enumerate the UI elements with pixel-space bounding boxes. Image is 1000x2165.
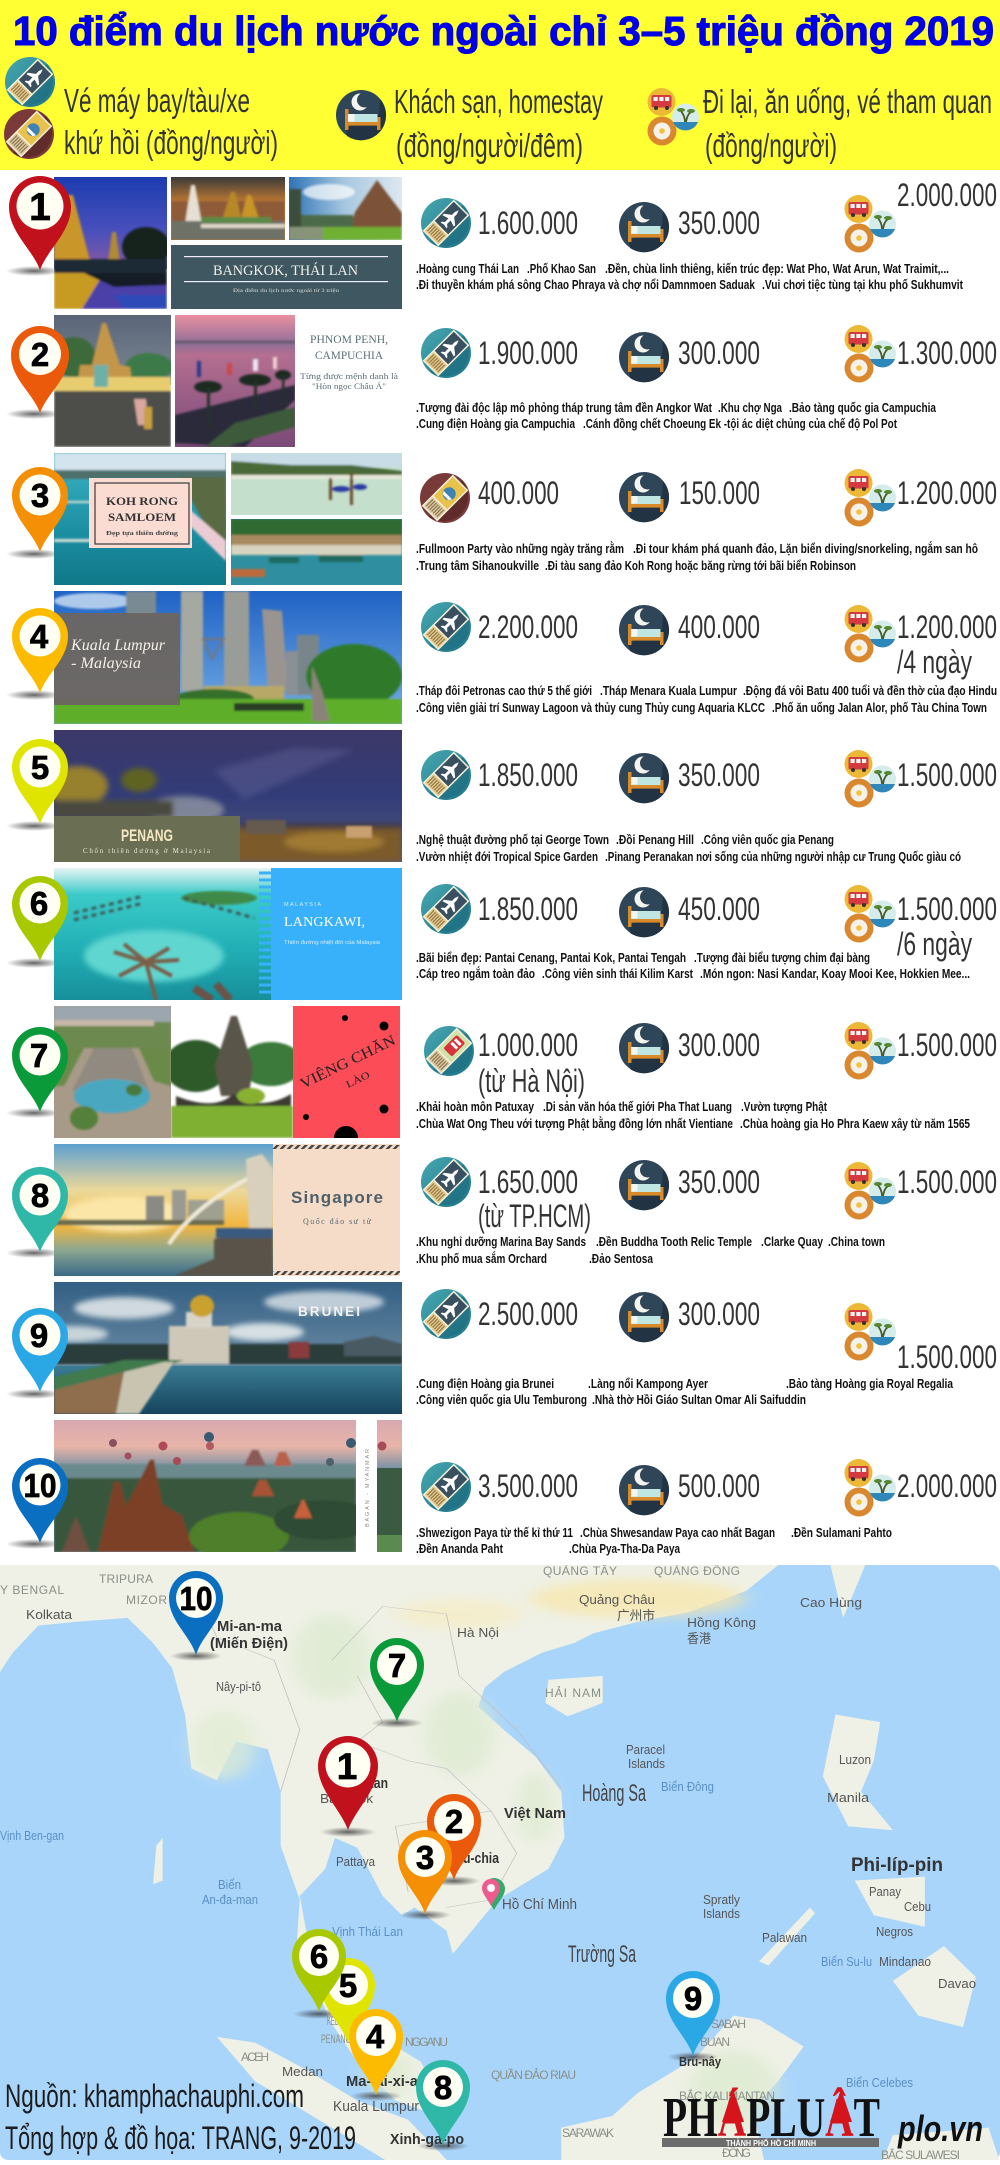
place labels: Vịnh Thái Lan: [332, 1924, 403, 1939]
highlights text: [416, 683, 997, 715]
pin 4: 4: [30, 618, 49, 655]
place labels: NGGANU: [405, 2035, 448, 2049]
icon: bed: [619, 332, 669, 382]
highlights text: .Đền Sulamani Pahto: [791, 1525, 892, 1540]
place labels: ĐÔNG: [722, 2145, 751, 2160]
place labels: Islands: [628, 1756, 665, 1771]
icon: boat ticket legend: [4, 109, 54, 159]
photo: Merlion: [54, 1144, 273, 1276]
place labels: ACEH: [241, 2050, 269, 2064]
map pin 4: [349, 2009, 403, 2095]
icon: plane ticket: [421, 328, 471, 378]
price: room: 450.000: [678, 891, 760, 927]
title card: Koh Rong: SAMLOEM: [108, 510, 176, 524]
photo: Independence monument: [54, 315, 171, 447]
pin 2: 2: [31, 336, 49, 373]
highlights text: .Khu nghỉ dưỡng Marina Bay Sands: [416, 1234, 586, 1249]
highlights text: .Clarke Quay: [761, 1234, 824, 1249]
icon: travel food sightseeing legend: [648, 88, 699, 146]
title card: Kuala Lumpur: Kuala Lumpur: [70, 637, 166, 654]
price: room: 350.000: [678, 1164, 760, 1200]
map pin 8: 8: [434, 2069, 452, 2106]
highlights text: .Shwezigon Paya từ thế kỉ thứ 11: [416, 1525, 573, 1540]
icon: expenses: [844, 195, 896, 252]
title card: Langkawi: MALAYSIA: [284, 902, 321, 908]
highlights text: .Đền Ananda Paht: [416, 1541, 504, 1556]
place labels: 香港: [687, 1631, 711, 1646]
place labels: Thái Lan: [338, 1775, 388, 1792]
highlights text: [416, 261, 964, 292]
photo: starry beach: [54, 730, 402, 862]
price: expenses: /4 ngày: [897, 644, 972, 680]
title card: Bangkok: [171, 245, 402, 309]
title card: Penang: Chốn thiên đường ở Malaysia: [83, 847, 211, 855]
legend text: expenses: [703, 83, 992, 164]
pin 6: 6: [30, 885, 48, 922]
photo: Wat Arun: [54, 177, 167, 309]
title: 10 điểm du lịch nước ngoài chỉ 3–5 triệu đồng 2019: [13, 8, 994, 54]
place labels: Quảng Châu: [579, 1592, 655, 1607]
highlights text: .Phố Khao San: [527, 261, 596, 276]
place labels: Hoàng Sa: [582, 1780, 646, 1807]
icon: bus ticket: [424, 1026, 474, 1076]
place labels: Cam-pu-chia: [425, 1850, 500, 1867]
icon: expenses: [844, 469, 896, 526]
icon: bed legend: [336, 90, 386, 140]
land masses: [0, 1560, 1000, 2165]
icon: plane ticket: [421, 1289, 471, 1339]
price: room: 350.000: [678, 205, 760, 241]
highlights text: .Fullmoon Party vào những ngày trăng rằm: [416, 541, 624, 556]
map pin 6: [292, 1929, 346, 2012]
place labels: 广州市: [617, 1608, 655, 1623]
source credit: [5, 2078, 356, 2156]
panel: row 3 Koh Rong Samloem: [6, 453, 997, 585]
highlights text: .Đi tàu sang đảo Koh Rong hoặc băng rừng tới bãi biển Robinson: [545, 558, 856, 573]
highlights text: .Khu phố mua sắm Orchard: [416, 1251, 547, 1266]
source credit: Tổng hợp & đồ họa: TRANG, 9-2019: [5, 2120, 356, 2156]
place labels: Islands: [703, 1906, 740, 1921]
icon: expenses: [844, 1459, 896, 1516]
place labels: Vịnh Ben-gan: [0, 1828, 64, 1843]
title card: Phnom Penh: PHNOM PENH,: [310, 332, 388, 346]
icon: bed: [619, 1292, 669, 1342]
place labels: Trường Sa: [568, 1941, 636, 1968]
highlights text: [416, 400, 937, 431]
price: room: 500.000: [678, 1468, 760, 1504]
map pin 4: 4: [366, 2018, 385, 2055]
icon: bed: [619, 605, 669, 655]
title card: Penang: [83, 826, 211, 855]
legend text: accommodation: (đồng/người/đêm): [396, 127, 583, 164]
place labels: Biển Đông: [661, 1779, 714, 1794]
place labels: BẮC SULAWESI: [881, 2147, 960, 2162]
price: tickets: 1.850.000: [478, 891, 578, 927]
title card: Vieng Chan: LÀO: [344, 1069, 372, 1091]
place labels: Bru-nây: [679, 2054, 722, 2069]
icon: expenses: [844, 605, 896, 662]
title card: Koh Rong: [89, 478, 192, 548]
highlights text: .Đền Buddha Tooth Relic Temple: [596, 1234, 752, 1249]
place labels: KEDAH: [327, 2014, 347, 2028]
highlights text: .Nhà thờ Hồi Giáo Sultan Omar Ali Saifuddin: [592, 1392, 806, 1407]
price: tickets: 1.900.000: [478, 335, 578, 371]
panel: row 9 Brunei: [6, 1282, 997, 1414]
place labels: QUẢNG TÂY: [543, 1563, 617, 1578]
legend text: expenses: (đồng/người): [705, 127, 837, 164]
title card: Singapore: Singapore: [291, 1188, 383, 1207]
icon: bed: [619, 202, 669, 252]
pin 2: [11, 326, 69, 413]
photo: Patuxay park: [54, 1006, 171, 1138]
highlights text: .Chùa Wat Ong Theu với tượng Phật bằng đồng lớn nhất Vientiane: [416, 1116, 733, 1131]
icon: expenses: [844, 325, 896, 382]
panel: row 7 Vientiane: [6, 1006, 997, 1138]
place labels: Phi-líp-pin: [851, 1855, 943, 1876]
highlights text: .Vườn nhiệt đới Tropical Spice Garden: [416, 849, 598, 864]
place labels: Medan: [282, 2064, 323, 2079]
price: tickets: 1.650.000: [478, 1164, 578, 1200]
highlights text: .Công viên quốc gia Ulu Temburong: [416, 1392, 587, 1407]
photo: aerial beach: [54, 453, 226, 585]
highlights text: .Cáp treo ngắm toàn đảo: [416, 966, 535, 981]
place labels: SABAH: [711, 2017, 746, 2031]
price: expenses: [897, 891, 997, 962]
map pin 3: [398, 1830, 452, 1914]
pin 3: [12, 467, 68, 552]
place labels: Cao Hùng: [800, 1595, 862, 1610]
icon: bed: [619, 887, 669, 937]
highlights text: .Công viên quốc gia Penang: [701, 832, 834, 847]
pin 5: 5: [31, 749, 49, 786]
highlights text: .Trung tâm Sihanoukville: [416, 558, 539, 573]
icon: bed: [619, 753, 669, 803]
icon: bed: [619, 1160, 669, 1210]
price: tickets: 1.000.000: [478, 1027, 578, 1063]
title card: Koh Rong: KOH RONG: [106, 494, 178, 508]
panel: row 4 Kuala Lumpur: [6, 591, 997, 724]
place labels: An-đa-man: [202, 1892, 258, 1907]
panel: row 6 Langkawi: [6, 868, 997, 1000]
title card: Phnom Penh: "Hòn ngọc Châu Á": [312, 381, 386, 391]
map pin 1: 1: [337, 1746, 357, 1787]
photo: lagoon resort: [54, 868, 271, 1000]
map markers: [169, 1571, 720, 2151]
title card: Vieng Chan: VIÊNG CHĂN: [297, 1032, 398, 1093]
pin 1: [9, 176, 71, 270]
pin 1: 1: [29, 186, 51, 229]
price: room: 300.000: [678, 1027, 760, 1063]
source credit: Nguồn: khamphachauphi.com: [5, 2078, 304, 2114]
panel: row 10 Bagan: [6, 1420, 997, 1560]
price: expenses: [897, 609, 997, 680]
pin 7: 7: [30, 1037, 48, 1074]
map pin 7: 7: [388, 1647, 406, 1684]
map panel: [0, 1563, 1000, 2162]
icon: expenses: [844, 1303, 896, 1360]
highlights text: [416, 832, 961, 864]
place labels: Kolkata: [26, 1607, 73, 1622]
legend text: transport: Vé máy bay/tàu/xe: [64, 82, 250, 119]
legend text: transport: [64, 82, 278, 161]
pin 8: 8: [31, 1177, 49, 1214]
place labels: Paracel: [626, 1742, 665, 1757]
place labels: Palawan: [762, 1930, 807, 1945]
highlights text: .Chùa Pya-Tha-Da Paya: [569, 1541, 681, 1556]
highlights text: .Khải hoàn môn Patuxay: [416, 1099, 535, 1114]
photo: Grand Palace sunset: [171, 177, 285, 240]
icon: plane ticket: [421, 1462, 471, 1512]
icon: bed: [619, 472, 669, 522]
price: tickets: 3.500.000: [478, 1468, 578, 1504]
panel: row 1 Bangkok: [6, 176, 997, 309]
map pin 9: [666, 1971, 720, 2056]
place labels: (Miến Điện): [210, 1635, 288, 1652]
place labels: Panay: [869, 1884, 901, 1899]
icon: boat ticket: [420, 473, 470, 523]
price: tickets: 2.200.000: [478, 609, 578, 645]
pin 10: [12, 1458, 68, 1543]
panel: row 8 Singapore: [6, 1144, 997, 1276]
highlights text: .China town: [828, 1234, 885, 1249]
place labels: Biển Su-lu: [821, 1954, 872, 1969]
title card: Langkawi: Thiên đường nhiệt đới của Malaysia: [284, 939, 381, 946]
place labels: Mi-an-ma: [217, 1618, 283, 1635]
highlights text: .Đi thuyền khám phá sông Chao Phraya và chợ nổi Damnmoen Saduak: [416, 277, 756, 292]
photo: Buddha park: [171, 1014, 293, 1138]
icon: plane ticket: [421, 884, 471, 934]
highlights text: .Đồi Penang Hill: [616, 832, 694, 847]
map pin 5: [321, 1958, 375, 2043]
logo: Phap Luat: PHÁPLUẬT: [663, 2086, 880, 2149]
header band: [0, 0, 1000, 170]
pin 6: [12, 876, 68, 961]
price: room: 350.000: [678, 757, 760, 793]
highlights text: .Di sản văn hóa thế giới Pha That Luang: [543, 1099, 732, 1114]
pin 4: [12, 608, 68, 693]
place labels: Mindanao: [879, 1954, 931, 1969]
map pin 1: [318, 1736, 378, 1830]
icon: bed: [619, 1023, 669, 1073]
pin 10: 10: [24, 1467, 56, 1504]
photo: hammocks: [231, 453, 402, 515]
icon: expenses: [844, 1162, 896, 1220]
title strip: Bagan Myanmar: BAGAN - MYANMAR: [365, 1449, 371, 1527]
legend text: accommodation: Khách sạn, homestay: [394, 83, 603, 120]
price: tickets: [478, 1164, 591, 1234]
title card: Koh Rong: Đẹp tựa thiên đường: [106, 531, 178, 537]
title card: Bangkok: BANGKOK, THÁI LAN: [213, 262, 358, 279]
place labels: HẢI NAM: [545, 1685, 601, 1700]
highlights text: [416, 950, 970, 981]
place labels: MIZOR: [126, 1593, 167, 1607]
highlights text: [416, 1099, 970, 1131]
highlights text: .Hoàng cung Thái Lan: [416, 261, 519, 276]
highlights text: .Tượng đài biểu tượng chim đại bàng: [694, 950, 870, 965]
icon: plane ticket: [421, 1157, 471, 1207]
highlights text: .Cung điện Hoàng gia Campuchia: [416, 416, 576, 431]
place labels: Kuala Lumpur: [333, 2098, 419, 2115]
title card: Langkawi: [259, 868, 402, 1000]
icon: plane ticket: [421, 198, 471, 248]
photo: fishing village: [231, 519, 402, 585]
place labels: Hồ Chí Minh: [502, 1896, 577, 1913]
map pin 2: 2: [445, 1803, 463, 1840]
highlights text: .Đảo Sentosa: [589, 1251, 654, 1266]
place labels: Pattaya: [336, 1854, 376, 1869]
legend text: accommodation: [394, 83, 603, 164]
photo: Bagan sliver: [377, 1420, 402, 1552]
place labels: Xinh-ga-po: [390, 2131, 464, 2148]
title card: Singapore: [273, 1144, 400, 1276]
pin 9: [12, 1308, 68, 1392]
icon: bed: [619, 1465, 669, 1515]
photo: Bagan balloons: [54, 1420, 356, 1552]
highlights text: .Tượng đài độc lập mô phỏng tháp trung tâm đền Angkor Wat: [416, 400, 713, 415]
place labels: Ma-lai-xi-a: [346, 2073, 419, 2090]
highlights text: [416, 1234, 885, 1266]
map pin 2: [427, 1794, 481, 1880]
icon: expenses: [844, 1022, 896, 1080]
place labels: Hồng Kông: [687, 1615, 756, 1630]
icon: plane ticket: [421, 602, 471, 652]
title card: Langkawi: LANGKAWI,: [284, 915, 365, 930]
place labels: TRIPURA: [99, 1572, 153, 1586]
highlights text: .Bãi biển đẹp: Pantai Cenang, Pantai Kok, Pantai Tengah: [416, 950, 686, 965]
highlights text: .Bảo tàng Hoàng gia Royal Regalia: [786, 1376, 954, 1391]
highlights text: [416, 1376, 954, 1407]
price: tickets: 400.000: [478, 475, 559, 511]
price: expenses: /6 ngày: [897, 926, 972, 962]
place labels: Cebu: [904, 1899, 931, 1914]
price: tickets: [478, 1027, 585, 1099]
place labels: BẮC KALIMANTAN: [679, 2088, 775, 2103]
icon: plane ticket: [421, 750, 471, 800]
title card: Bangkok: Địa điểm du lịch nước ngoài từ 3 triệu: [233, 287, 339, 294]
highlights text: .Công viên giải trí Sunway Lagoon và thủy cung Thủy cung Aquaria KLCC: [416, 700, 765, 715]
photo: Petronas towers: [54, 591, 402, 724]
photo: Omar Ali mosque: [54, 1282, 402, 1414]
highlights text: .Vườn tượng Phật: [741, 1099, 828, 1114]
price: tickets: (từ TP.HCM): [478, 1198, 591, 1234]
title card: Phnom Penh: CAMPUCHIA: [315, 348, 383, 362]
price: room: 300.000: [678, 335, 760, 371]
place labels: Spratly: [703, 1892, 740, 1907]
highlights text: .Tháp đôi Petronas cao thứ 5 thế giới: [416, 683, 592, 698]
place labels: QUẢNG ĐÔNG: [654, 1563, 740, 1578]
place labels: SARAWAK: [562, 2126, 614, 2140]
price: room: 300.000: [678, 1296, 760, 1332]
place labels: Biển: [218, 1877, 241, 1892]
title card: Vieng Chan: [293, 1006, 400, 1138]
map pin 7: [370, 1638, 424, 1722]
highlights text: .Làng nổi Kampong Ayer: [588, 1376, 708, 1391]
pin 7: [12, 1027, 68, 1112]
title card: Kuala Lumpur: [70, 637, 166, 672]
place labels: Davao: [938, 1976, 976, 1991]
map pin 5: 5: [339, 1967, 357, 2004]
logo: Phap Luat: THÀNH PHỐ HỒ CHÍ MINH: [726, 2138, 816, 2148]
pin 5: [12, 739, 68, 824]
map pin 10: 10: [180, 1580, 212, 1617]
title card: Phnom Penh: [300, 332, 399, 391]
panel: row 2 Phnom Penh: [6, 315, 997, 447]
highlights text: .Công viên sinh thái Kilim Karst: [542, 966, 694, 981]
place labels: QUẦN ĐẢO RIAU: [491, 2067, 576, 2082]
place labels: Bangkok: [320, 1791, 374, 1806]
icon: expenses: [844, 885, 896, 942]
price: room: 400.000: [678, 609, 760, 645]
place labels: Manila: [827, 1790, 870, 1805]
place labels: Nây-pi-tô: [216, 1679, 261, 1694]
place labels: Luzon: [839, 1752, 871, 1767]
place labels: Hà Nội: [457, 1625, 499, 1640]
price: room: 150.000: [679, 475, 760, 511]
map pin 9: 9: [684, 1980, 702, 2017]
panel: row 5 Penang: [6, 730, 997, 864]
map pin 3: 3: [416, 1839, 434, 1876]
highlights text: [416, 541, 978, 573]
title card: Penang: PENANG: [121, 826, 173, 845]
photo: royal palace: [289, 177, 402, 240]
place labels: [0, 1563, 976, 2162]
highlights text: .Khu chợ Nga: [718, 400, 783, 415]
highlights text: [416, 1525, 892, 1556]
photo: riverside at dusk: [175, 315, 295, 447]
title card: Brunei: BRUNEI: [298, 1304, 360, 1319]
map pin 10: [169, 1571, 223, 1655]
place labels: Negros: [876, 1924, 913, 1939]
price: tickets: 1.600.000: [478, 205, 578, 241]
pin 8: [12, 1167, 68, 1252]
map pin 6: 6: [310, 1938, 328, 1975]
highlights text: .Nghệ thuật đường phố tại George Town: [416, 832, 609, 847]
place labels: Y BENGAL: [0, 1583, 64, 1597]
title card: Phnom Penh: Từng được mệnh danh là: [300, 372, 399, 381]
title card: Singapore: Quốc đảo sư tử: [303, 1217, 372, 1226]
price: tickets: 1.850.000: [478, 757, 578, 793]
place labels: Biển Celebes: [846, 2075, 913, 2090]
place labels: BUAN: [700, 2035, 730, 2049]
legend text: transport: khứ hồi (đồng/người): [64, 124, 278, 161]
place labels: PENANG: [321, 2032, 351, 2046]
place labels: Việt Nam: [504, 1805, 566, 1822]
icon: plane ticket legend: [5, 57, 55, 107]
highlights text: .Chùa Shwesandaw Paya cao nhất Bagan: [580, 1525, 775, 1540]
price: tickets: (từ Hà Nội): [478, 1063, 585, 1099]
heart marker: [482, 1878, 505, 1910]
icon: expenses: [844, 750, 896, 808]
map pin 8: [416, 2060, 470, 2145]
price: tickets: 2.500.000: [478, 1296, 578, 1332]
highlights text: .Tháp Menara Kuala Lumpur: [600, 683, 737, 698]
highlights text: .Cung điện Hoàng gia Brunei: [416, 1376, 554, 1391]
pin 3: 3: [31, 477, 49, 514]
title card: Kuala Lumpur: - Malaysia: [71, 655, 141, 672]
highlights text: .Cánh đồng chết Choeung Ek -tội ác diệt chủng của chế độ Pol Pot: [583, 416, 897, 431]
highlights text: .Bảo tàng quốc gia Campuchia: [789, 400, 937, 415]
pin 9: 9: [30, 1317, 48, 1354]
